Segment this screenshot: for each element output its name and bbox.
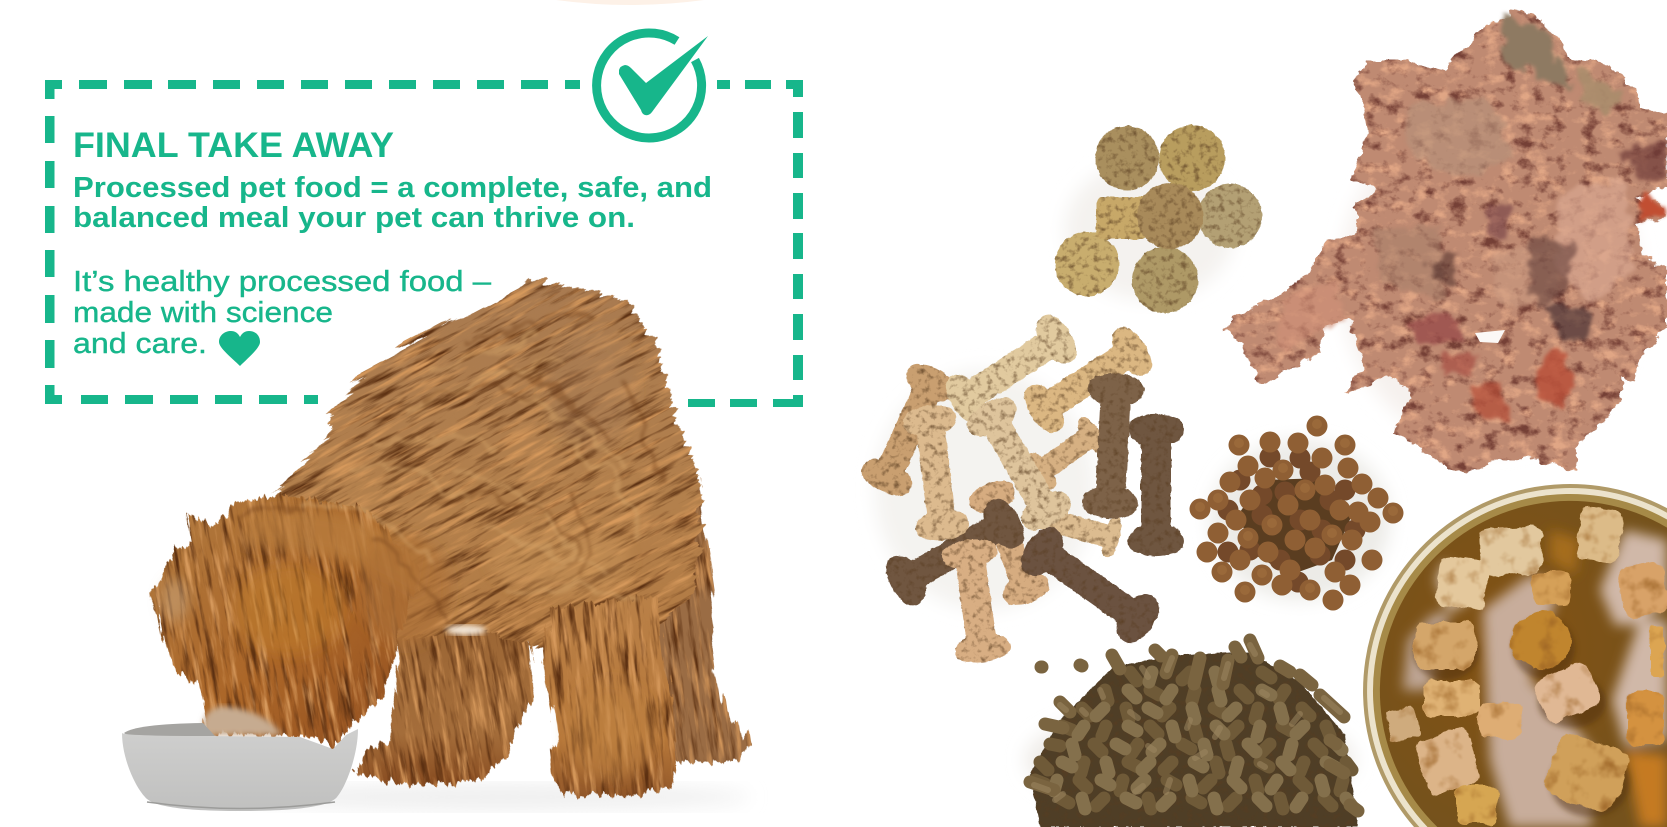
food: pellet pile bbox=[1025, 640, 1358, 827]
food: kibble pile bbox=[1200, 424, 1393, 600]
icon: check mark badge bbox=[588, 24, 710, 146]
meat chunks bbox=[1385, 507, 1667, 824]
food: round treats bbox=[1055, 125, 1262, 313]
meat shading patches bbox=[1280, 15, 1667, 420]
text block: healthy processed food bbox=[73, 266, 492, 360]
icon: heart bbox=[219, 331, 260, 366]
text block: main message: balanced meal your pet can thrive on. bbox=[73, 202, 635, 234]
chunk shadows bbox=[1413, 617, 1630, 817]
front leg bbox=[521, 581, 697, 811]
curly fur locks bbox=[240, 320, 660, 620]
shading blends between head and body bbox=[161, 330, 655, 780]
text block: healthy processed food: made with science bbox=[73, 297, 333, 329]
heading: final take away: FINAL TAKE AWAY bbox=[73, 126, 394, 165]
food: dog biscuit bones bbox=[857, 309, 1184, 666]
decorative top arc bbox=[556, 0, 704, 5]
bowl bbox=[122, 723, 358, 811]
near hind leg bbox=[322, 570, 564, 817]
text block: main message: Processed pet food = a complete, safe, and bbox=[73, 172, 712, 204]
far rear leg bbox=[600, 455, 792, 777]
dashed frame bbox=[45, 80, 803, 407]
chest patch and muzzle bbox=[446, 625, 486, 635]
photo: dog eating from a bowl bbox=[107, 101, 857, 827]
text block: healthy processed food: and care. bbox=[73, 328, 207, 360]
gravy swirl bbox=[1403, 530, 1667, 827]
text block: main message bbox=[73, 172, 712, 234]
food: open can of chunks in gravy bbox=[1363, 484, 1667, 827]
body bbox=[120, 101, 857, 827]
head bbox=[107, 449, 463, 794]
food: shredded meat bbox=[1222, 8, 1667, 475]
text block: healthy processed food: It’s healthy processed food – bbox=[73, 266, 492, 298]
